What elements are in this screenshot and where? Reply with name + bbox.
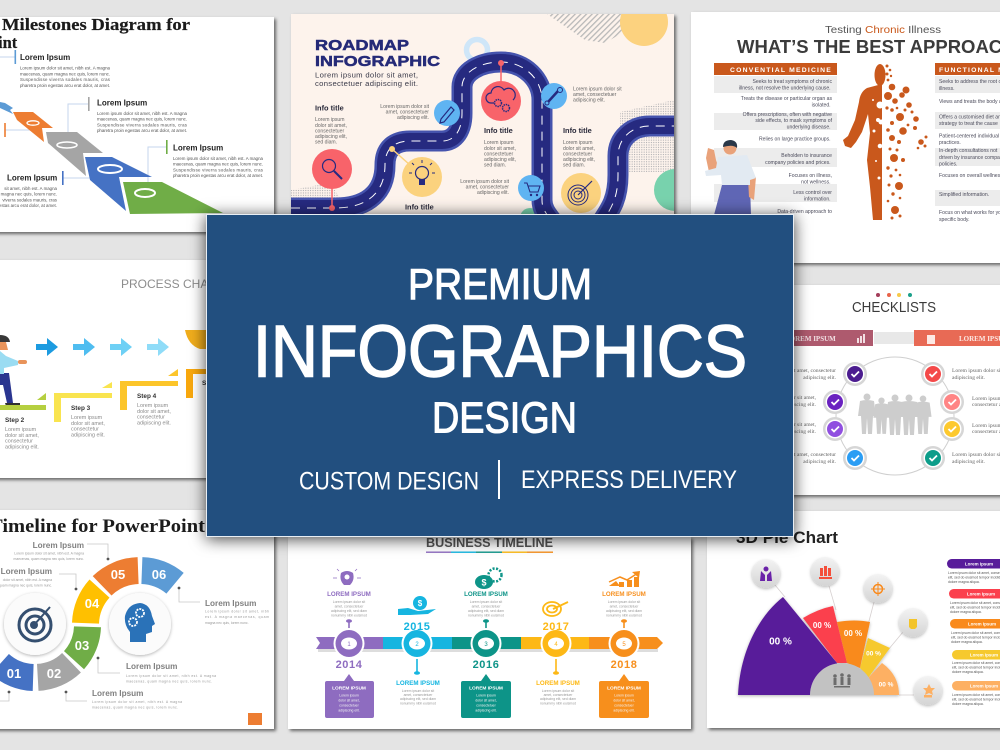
panel: process chart — [0, 260, 225, 478]
column header: functional — [935, 63, 1000, 75]
milestone label 2: maecenas, quam magna nec quis, lorem nunc. — [97, 116, 187, 122]
percent labels: 00 % — [866, 650, 881, 658]
kicker: testing chronic illness: Testing Chronic Illness — [825, 25, 941, 36]
body figure — [843, 64, 928, 220]
stop: magnifier — [312, 149, 352, 211]
bottom note 2017: amet, consectetuer — [544, 693, 573, 697]
year labels: 2014 — [336, 659, 363, 671]
bottom note 2015 — [396, 680, 440, 706]
info block 2 — [484, 126, 516, 168]
top note 2016: Lorem ipsum dolor sit — [470, 600, 502, 604]
conventional medicine list: Relies on large practice groups. — [759, 136, 831, 142]
box 2014: dolor sit amet, — [338, 698, 360, 702]
ring — [836, 357, 954, 475]
panel: roadmap infographic — [290, 14, 678, 214]
arc segments 01 to 06: 05 — [111, 567, 125, 582]
info block 2: consectetuer — [484, 152, 513, 158]
callout: 02 — [92, 689, 182, 710]
arc segments 01 to 06: 01 — [7, 666, 21, 681]
functional medicine list: strategy to treat the cause — [939, 121, 998, 127]
character: running man — [0, 335, 27, 406]
step 2 text: Lorem ipsum — [5, 427, 37, 433]
arc segments 01 to 06: 02 — [47, 666, 61, 681]
central banner — [206, 214, 794, 536]
top note 2018: LOREM IPSUM — [602, 591, 646, 598]
icon button: orange target — [864, 575, 892, 603]
step 3 text: Lorem ipsum — [71, 415, 103, 421]
milestone label 3 — [166, 140, 264, 178]
roadmap title: ROADMAP — [315, 37, 409, 54]
step 3 text: adipiscing elit. — [71, 432, 105, 438]
top note 2018 — [602, 591, 646, 618]
banner tagline: custom design: CUSTOM DESIGN — [299, 468, 479, 496]
panel: milestones diagram — [0, 15, 274, 232]
legend item 3: dolore magna aliqua. — [951, 640, 983, 644]
icon: coin and gear: $ — [481, 578, 487, 588]
column header: conventional: CONVENTIAL MEDICINE — [730, 67, 832, 74]
milestone label 3: maecenas, quam magna nec quis, lorem nunc. — [173, 162, 263, 166]
header bars: LOREM IPSUM — [785, 335, 836, 343]
arc segments 01 to 06: 06 — [152, 567, 166, 582]
milestone arrows — [0, 102, 223, 214]
check nodes — [823, 362, 964, 470]
info block 4: Info title — [405, 202, 434, 212]
target icon circle — [4, 593, 66, 655]
node 1: 1 — [347, 642, 351, 648]
step 2 text: Step 2 — [5, 417, 25, 424]
bottom note 2015: amet, consectetuer — [404, 693, 433, 697]
functional medicine list: specific body. — [939, 217, 969, 223]
stop: cloud gears — [481, 60, 521, 121]
year labels: 2015 — [404, 621, 430, 633]
bottom note 2017: adipiscing elit, sed diam — [540, 697, 576, 701]
heading: process chart: PROCESS CHART — [121, 277, 225, 291]
trophy icon — [185, 330, 210, 349]
connectors — [775, 585, 914, 695]
side note: cart: adipiscing elit. — [477, 190, 509, 196]
legend item 1: Lorem Ipsum — [965, 562, 993, 566]
right checklist text: adipiscing elit. — [952, 459, 986, 465]
stop: cart — [518, 175, 544, 201]
box 2014: Lorem ipsum — [339, 694, 359, 698]
header bars — [785, 330, 1000, 346]
node 5: 5 — [622, 642, 626, 648]
node 2: 2 — [415, 642, 419, 648]
step 3 shape — [54, 382, 112, 422]
icon: purple bulb — [333, 569, 361, 585]
box 2014: LOREM IPSUM — [332, 686, 366, 692]
step 4 text — [137, 393, 171, 426]
node 2 — [402, 628, 432, 659]
year labels — [336, 621, 637, 671]
conventional medicine list: Less control over — [793, 190, 832, 196]
left checklist text: adipiscing elit. — [803, 459, 837, 465]
side note: wrench: amet, consectetuer — [573, 92, 617, 98]
milestone label 2: pharetra proin egestas arcu erat dolor, at amet. — [97, 128, 187, 133]
functional medicine list: In-depth consultations not — [939, 148, 998, 154]
side note: wrench: Lorem ipsum dolor sit — [573, 86, 622, 92]
milestone label 1 — [14, 50, 111, 88]
left checklist text: Lorem ipsum dolor sit amet, consectetur — [746, 368, 836, 374]
heading: 3D pie chart: 3D Pie Chart — [736, 528, 838, 547]
panel: testing chronic illness — [691, 12, 1000, 263]
left checklist text: adipiscing elit. — [803, 375, 837, 381]
left checklist text: Lorem ipsum dolor sit amet, — [752, 395, 817, 401]
right checklist text: adipiscing elit. — [952, 375, 986, 381]
milestone label 1: Lorem ipsum dolor sit amet, nibh est. A magna — [20, 66, 111, 70]
banner divider — [498, 460, 500, 499]
legend item 4 — [952, 650, 1000, 674]
callout: 04: Lorem Ipsum — [1, 567, 52, 576]
milestone label 4: magna nec quis, lorem nunc. — [1, 192, 57, 196]
top note 2014: nonummy nibh euismod — [331, 614, 367, 618]
callout: 02: Lorem ipsum dolor sit amet, nibh est. A magna — [92, 700, 182, 704]
conventional medicine list: Beholden to insurance — [781, 153, 832, 159]
box 2016: adipiscing elit. — [475, 708, 497, 712]
box 2016: dolor sit amet, — [475, 698, 497, 702]
conventional medicine list: underlying disease. — [787, 124, 831, 130]
banner tagline: express delivery: EXPRESS DELIVERY — [521, 466, 737, 494]
box 2018: dolor sit amet, — [613, 698, 635, 702]
heading: checklists: CHECKLISTS — [852, 299, 936, 316]
box 2018 — [599, 674, 649, 718]
heading: checklists — [852, 293, 936, 316]
conventional medicine list: Treats the disease or particular organ as — [741, 96, 832, 102]
percent labels — [769, 621, 894, 688]
conventional medicine list: Data-driven approach to — [777, 209, 832, 215]
side note: wrench: adipiscing elit. — [573, 98, 605, 104]
callout: 06: magna nec quis, lorem nunc. — [205, 621, 249, 625]
step 3 text: consectetur — [71, 426, 99, 432]
banner line: infographics: INFOGRAPHICS — [253, 310, 747, 392]
top note 2016: nonummy nibh euismod — [468, 614, 504, 618]
functional medicine list: Patient-centered individual — [939, 134, 999, 140]
callout: 04: dolor sit amet, nibh est. A magna — [3, 578, 52, 582]
step 4 text: adipiscing elit. — [137, 420, 171, 426]
info block 1: sed diam. — [315, 140, 337, 146]
legend item 4: Lorem Ipsum — [970, 652, 998, 658]
bottom note 2015: nonummy nibh euismod — [400, 702, 436, 706]
legend item 5 — [952, 681, 1000, 706]
left checklist text: Lorem ipsum dolor sit amet, — [752, 422, 817, 428]
node 4 — [540, 628, 572, 659]
info block 2: dolor sit amet, — [484, 146, 516, 152]
milestone label 2: Lorem ipsum dolor sit amet, nibh est. A magna — [97, 111, 188, 116]
info block 1: Lorem ipsum — [315, 117, 344, 123]
box 2018: adipiscing elit. — [613, 708, 635, 712]
character: man with OK gesture — [705, 140, 756, 215]
milestone label 4: sit amet, nibh est. A magna — [4, 186, 58, 191]
functional medicine list: policies. — [939, 162, 957, 168]
top note 2014 — [327, 591, 371, 618]
info block 1: consectetuer — [315, 128, 344, 134]
roadmap subtitle: consectetuer adipiscing elit. — [315, 79, 418, 88]
bottom note 2017: nonummy nibh euismod — [540, 702, 576, 706]
milestone label 4: viverra sodales mauris, cras — [2, 198, 58, 202]
top note 2016: LOREM IPSUM — [464, 591, 508, 598]
box 2018: consectetuer — [614, 704, 635, 708]
milestone label 3: Suspendisse viverra sodales mauris, cras — [173, 168, 264, 172]
milestone orange marker — [4, 123, 6, 137]
box 2018: LOREM IPSUM — [607, 686, 641, 692]
conventional medicine list: Seeks to treat symptoms of chronic — [752, 79, 832, 85]
conventional medicine list: Offers prescriptions, often with negative — [743, 112, 832, 118]
box 2016 — [461, 674, 511, 718]
year labels: 2017 — [543, 621, 569, 633]
callout: 03 — [126, 662, 216, 684]
stop: target — [561, 173, 601, 213]
top note 2014: Lorem ipsum dolor sit — [333, 600, 365, 604]
side note: cart: amet, consectetuer — [466, 184, 509, 190]
process arrows — [36, 338, 169, 356]
milestone label 1: maecenas, quam magna nec quis, lorem nunc. — [20, 72, 110, 76]
callout: 02: Lorem Ipsum — [92, 689, 143, 698]
heading: business timeline: BUSINESS TIMELINE — [426, 535, 553, 550]
callout: 04 — [0, 567, 52, 588]
functional medicine list: practices. — [939, 140, 961, 146]
node 3: 3 — [484, 642, 488, 648]
legend item 2: Lorem Ipsum — [967, 592, 995, 596]
row bands — [714, 76, 1000, 206]
legend item 3: Lorem Ipsum — [968, 622, 996, 626]
info block 3: sed diam. — [563, 162, 585, 168]
pie sectors — [738, 597, 899, 695]
callout: 06: Lorem ipsum dolor sit amet, nibh — [205, 610, 269, 614]
step 3 text — [71, 405, 105, 438]
milestone label 2: Lorem Ipsum — [97, 98, 147, 108]
left checklist text: consectetur adipiscing elit. — [756, 429, 817, 435]
conventional medicine list: information. — [804, 196, 831, 202]
milestone label 1: Suspendisse viverra sodales mauris, cras — [20, 77, 111, 82]
top note 2016 — [464, 591, 508, 618]
road — [291, 62, 680, 225]
callout: 05: maecenas, quam magna nec quis, lorem nunc. — [14, 557, 84, 561]
milestone label 2 — [88, 97, 188, 133]
legend item 2 — [949, 589, 1000, 614]
timeline ribbon — [316, 637, 663, 652]
step 4 text: Step 4 — [137, 393, 157, 400]
box 2016: LOREM IPSUM — [469, 686, 503, 692]
legend item 4: dolore magna aliqua. — [952, 670, 984, 674]
functional medicine list: illness. — [939, 86, 955, 92]
milestone label 2: Suspendisse viverra sodales mauris, cras — [97, 122, 188, 128]
icon: hand with coin — [398, 596, 436, 615]
box 2014 — [325, 674, 374, 718]
stems — [346, 619, 627, 675]
people silhouettes — [858, 394, 932, 435]
milestone connectors — [0, 57, 167, 186]
bottom note 2017: Lorem ipsum dolor sit — [542, 689, 574, 693]
column header: conventional — [714, 63, 837, 75]
info block 3: adipiscing elit, — [563, 157, 595, 163]
box 2016: consectetuer — [476, 704, 497, 708]
milestone label 3: pharetra proin egestas arcu erat dolor, at amet. — [173, 173, 263, 178]
milestone label 1: Lorem Ipsum — [20, 53, 70, 62]
icon button: light orange star — [914, 677, 942, 705]
orange logo square — [248, 713, 262, 725]
box 2014: consectetuer — [339, 704, 360, 708]
side note: pencil: amet, consectetuer — [386, 110, 429, 116]
info block 2: Info title — [484, 126, 513, 135]
step 2 shape — [0, 393, 46, 410]
conventional medicine list: isolated. — [812, 102, 831, 108]
bottom note 2017 — [536, 680, 580, 706]
arc segments 01 to 06: 04 — [85, 596, 100, 611]
step 5 shape — [186, 369, 210, 398]
milestone label 1: pharetra proin egestas arcu erat dolor, at amet. — [20, 83, 110, 88]
panel: 3D pie chart — [707, 511, 1000, 728]
icon: orange growth chart — [609, 571, 640, 587]
callout: 03: Lorem ipsum dolor sit amet, nibh est. A magna — [126, 674, 216, 678]
head gears icon circle — [109, 593, 171, 655]
top note 2016: adipiscing elit, sed diam — [468, 609, 504, 613]
arc segments 01 to 06: 03 — [75, 638, 89, 653]
step 4 text: consectetur — [137, 414, 165, 420]
step 2 text — [5, 417, 39, 450]
callout: 06: Lorem Ipsum — [205, 599, 256, 608]
arc segments 01 to 06 — [0, 557, 184, 691]
bottom note 2015: adipiscing elit, sed diam — [400, 697, 436, 701]
step 2 text: consectetur — [5, 438, 33, 444]
info block 1: dolor sit amet, — [315, 123, 347, 129]
callout: 06 — [205, 599, 269, 625]
step 4 text: dolor sit amet, — [137, 409, 171, 415]
legend item 5: Lorem Ipsum — [970, 684, 998, 688]
roadmap title: INFOGRAPHIC — [315, 53, 440, 70]
percent labels: 00 % — [769, 636, 792, 648]
top note 2014: LOREM IPSUM — [327, 591, 371, 598]
node 4: 4 — [554, 642, 558, 648]
callout: 03: Lorem Ipsum — [126, 662, 177, 671]
top note 2014: amet, consectetuer — [335, 604, 364, 608]
info block 3: consectetuer — [563, 152, 592, 158]
stop: light bulb — [389, 146, 442, 197]
icon button: purple hands — [752, 560, 780, 588]
conventional medicine list: Focuses on illness, — [789, 173, 832, 179]
icon: yellow target — [543, 602, 568, 616]
step 4 shape — [120, 369, 178, 410]
step 4 text: Lorem ipsum — [137, 403, 169, 409]
conventional medicine list: illness, not resolve the underlying cause. — [739, 86, 831, 92]
side note: cart: Lorem ipsum dolor sit — [460, 179, 510, 185]
panel: business timeline — [288, 535, 691, 729]
step 2 text: adipiscing elit. — [5, 444, 39, 450]
left checklist text: consectetur adipiscing elit. — [756, 402, 817, 408]
info block 3: Lorem ipsum — [563, 140, 592, 146]
roadmap subtitle: Lorem ipsum dolor sit amet, — [315, 70, 418, 80]
banner line: design: DESIGN — [432, 394, 577, 442]
bottom note 2015: Lorem ipsum dolor sit — [402, 689, 434, 693]
callout: 03: maecenas, quam magna nec quis, lorem nunc. — [126, 680, 212, 684]
legend item 5: dolore magna aliqua. — [952, 702, 984, 706]
left checklist text: Lorem ipsum dolor sit amet, consectetur — [746, 452, 836, 458]
top note 2018: amet, consectetuer — [610, 604, 639, 608]
icon button: red people — [811, 558, 839, 586]
percent labels: 00 % — [813, 621, 831, 630]
legend item 3 — [950, 619, 1000, 644]
info block 3: dolor sit amet, — [563, 146, 595, 152]
info block 1: adipiscing elit, — [315, 134, 347, 140]
callout: 02: maecenas, quam magna nec quis, lorem nunc. — [92, 706, 178, 710]
step 3 text: dolor sit amet, — [71, 421, 105, 427]
info block 1: Info title — [315, 104, 344, 112]
milestone label 3: Lorem Ipsum — [173, 144, 223, 152]
banner line: premium: PREMIUM — [408, 260, 592, 309]
callout: 06: est. A magna maecenas, quam — [205, 615, 269, 619]
side note: pencil: adipiscing elit. — [397, 115, 429, 121]
legend item 1 — [947, 559, 1000, 584]
legend item 1: dolore magna aliqua. — [948, 580, 980, 584]
box 2016: Lorem ipsum — [476, 694, 496, 698]
conventional medicine list: company policies and prices. — [765, 160, 831, 166]
callout lines — [0, 544, 200, 701]
conventional medicine list: side effects, to mask symptoms of — [755, 118, 833, 124]
panel: timeline for powerpoint — [0, 510, 274, 729]
box 2018: Lorem ipsum — [614, 694, 634, 698]
step 3 text: Step 3 — [71, 405, 91, 412]
callout: 05: Lorem Ipsum — [33, 541, 84, 550]
year labels: 2016 — [473, 659, 499, 671]
stop: pencil — [434, 100, 460, 126]
side note: pencil: Lorem ipsum dolor sit — [380, 104, 430, 110]
callout: 04: quam magna nec quis, lorem nunc. — [0, 584, 52, 588]
top note 2018: nonummy nibh euismod — [606, 614, 642, 618]
functional medicine list: Simplified information. — [939, 192, 989, 198]
info block 3 — [563, 126, 595, 168]
icon: hand with coin: $ — [418, 599, 423, 608]
percent labels: 00 % — [879, 682, 894, 688]
panel title: milestones: Milestones Diagram for — [2, 15, 190, 34]
top note 2018: Lorem ipsum dolor sit — [608, 600, 640, 604]
year labels: 2018 — [611, 659, 637, 671]
panel: checklists — [746, 285, 1000, 495]
milestone label 3: Lorem ipsum dolor sit amet, nibh est. A magna — [173, 156, 264, 161]
top note 2016: amet, consectetuer — [472, 604, 501, 608]
legend item 2: dolore magna aliqua. — [950, 610, 982, 614]
callout dots — [8, 558, 180, 693]
percent labels: 00 % — [844, 629, 862, 638]
milestone label 4: Lorem Ipsum — [7, 174, 57, 182]
box 2014: adipiscing elit. — [338, 708, 360, 712]
node 5 — [608, 628, 640, 659]
callout: 05: Lorem ipsum dolor sit amet, nibh est. A magna — [14, 552, 84, 556]
background shapes — [291, 14, 674, 214]
top note 2018: adipiscing elit, sed diam — [606, 609, 642, 613]
node 1 — [334, 628, 364, 659]
step 2 text: dolor sit amet, — [5, 433, 39, 439]
info block 1 — [315, 104, 347, 146]
info block 2: Lorem ipsum — [484, 140, 513, 146]
step 5 text: Step 5 — [202, 380, 222, 387]
icon button: yellow head — [899, 609, 927, 637]
milestone label 4 — [0, 171, 64, 208]
info block 3: Info title — [563, 126, 592, 135]
bottom note 2015: LOREM IPSUM — [396, 680, 440, 687]
icon: coin and gear — [475, 568, 502, 589]
info block 2: adipiscing elit, — [484, 157, 516, 163]
conventional medicine list: not wellness. — [801, 180, 831, 186]
stop: wrench — [541, 83, 567, 109]
center people icon — [833, 673, 851, 688]
bottom note 2017: LOREM IPSUM — [536, 680, 580, 687]
node 3 — [470, 628, 502, 659]
info block 2: sed diam. — [484, 162, 506, 168]
callout: 05 — [14, 541, 84, 561]
top note 2014: adipiscing elit, sed diam — [331, 609, 367, 613]
